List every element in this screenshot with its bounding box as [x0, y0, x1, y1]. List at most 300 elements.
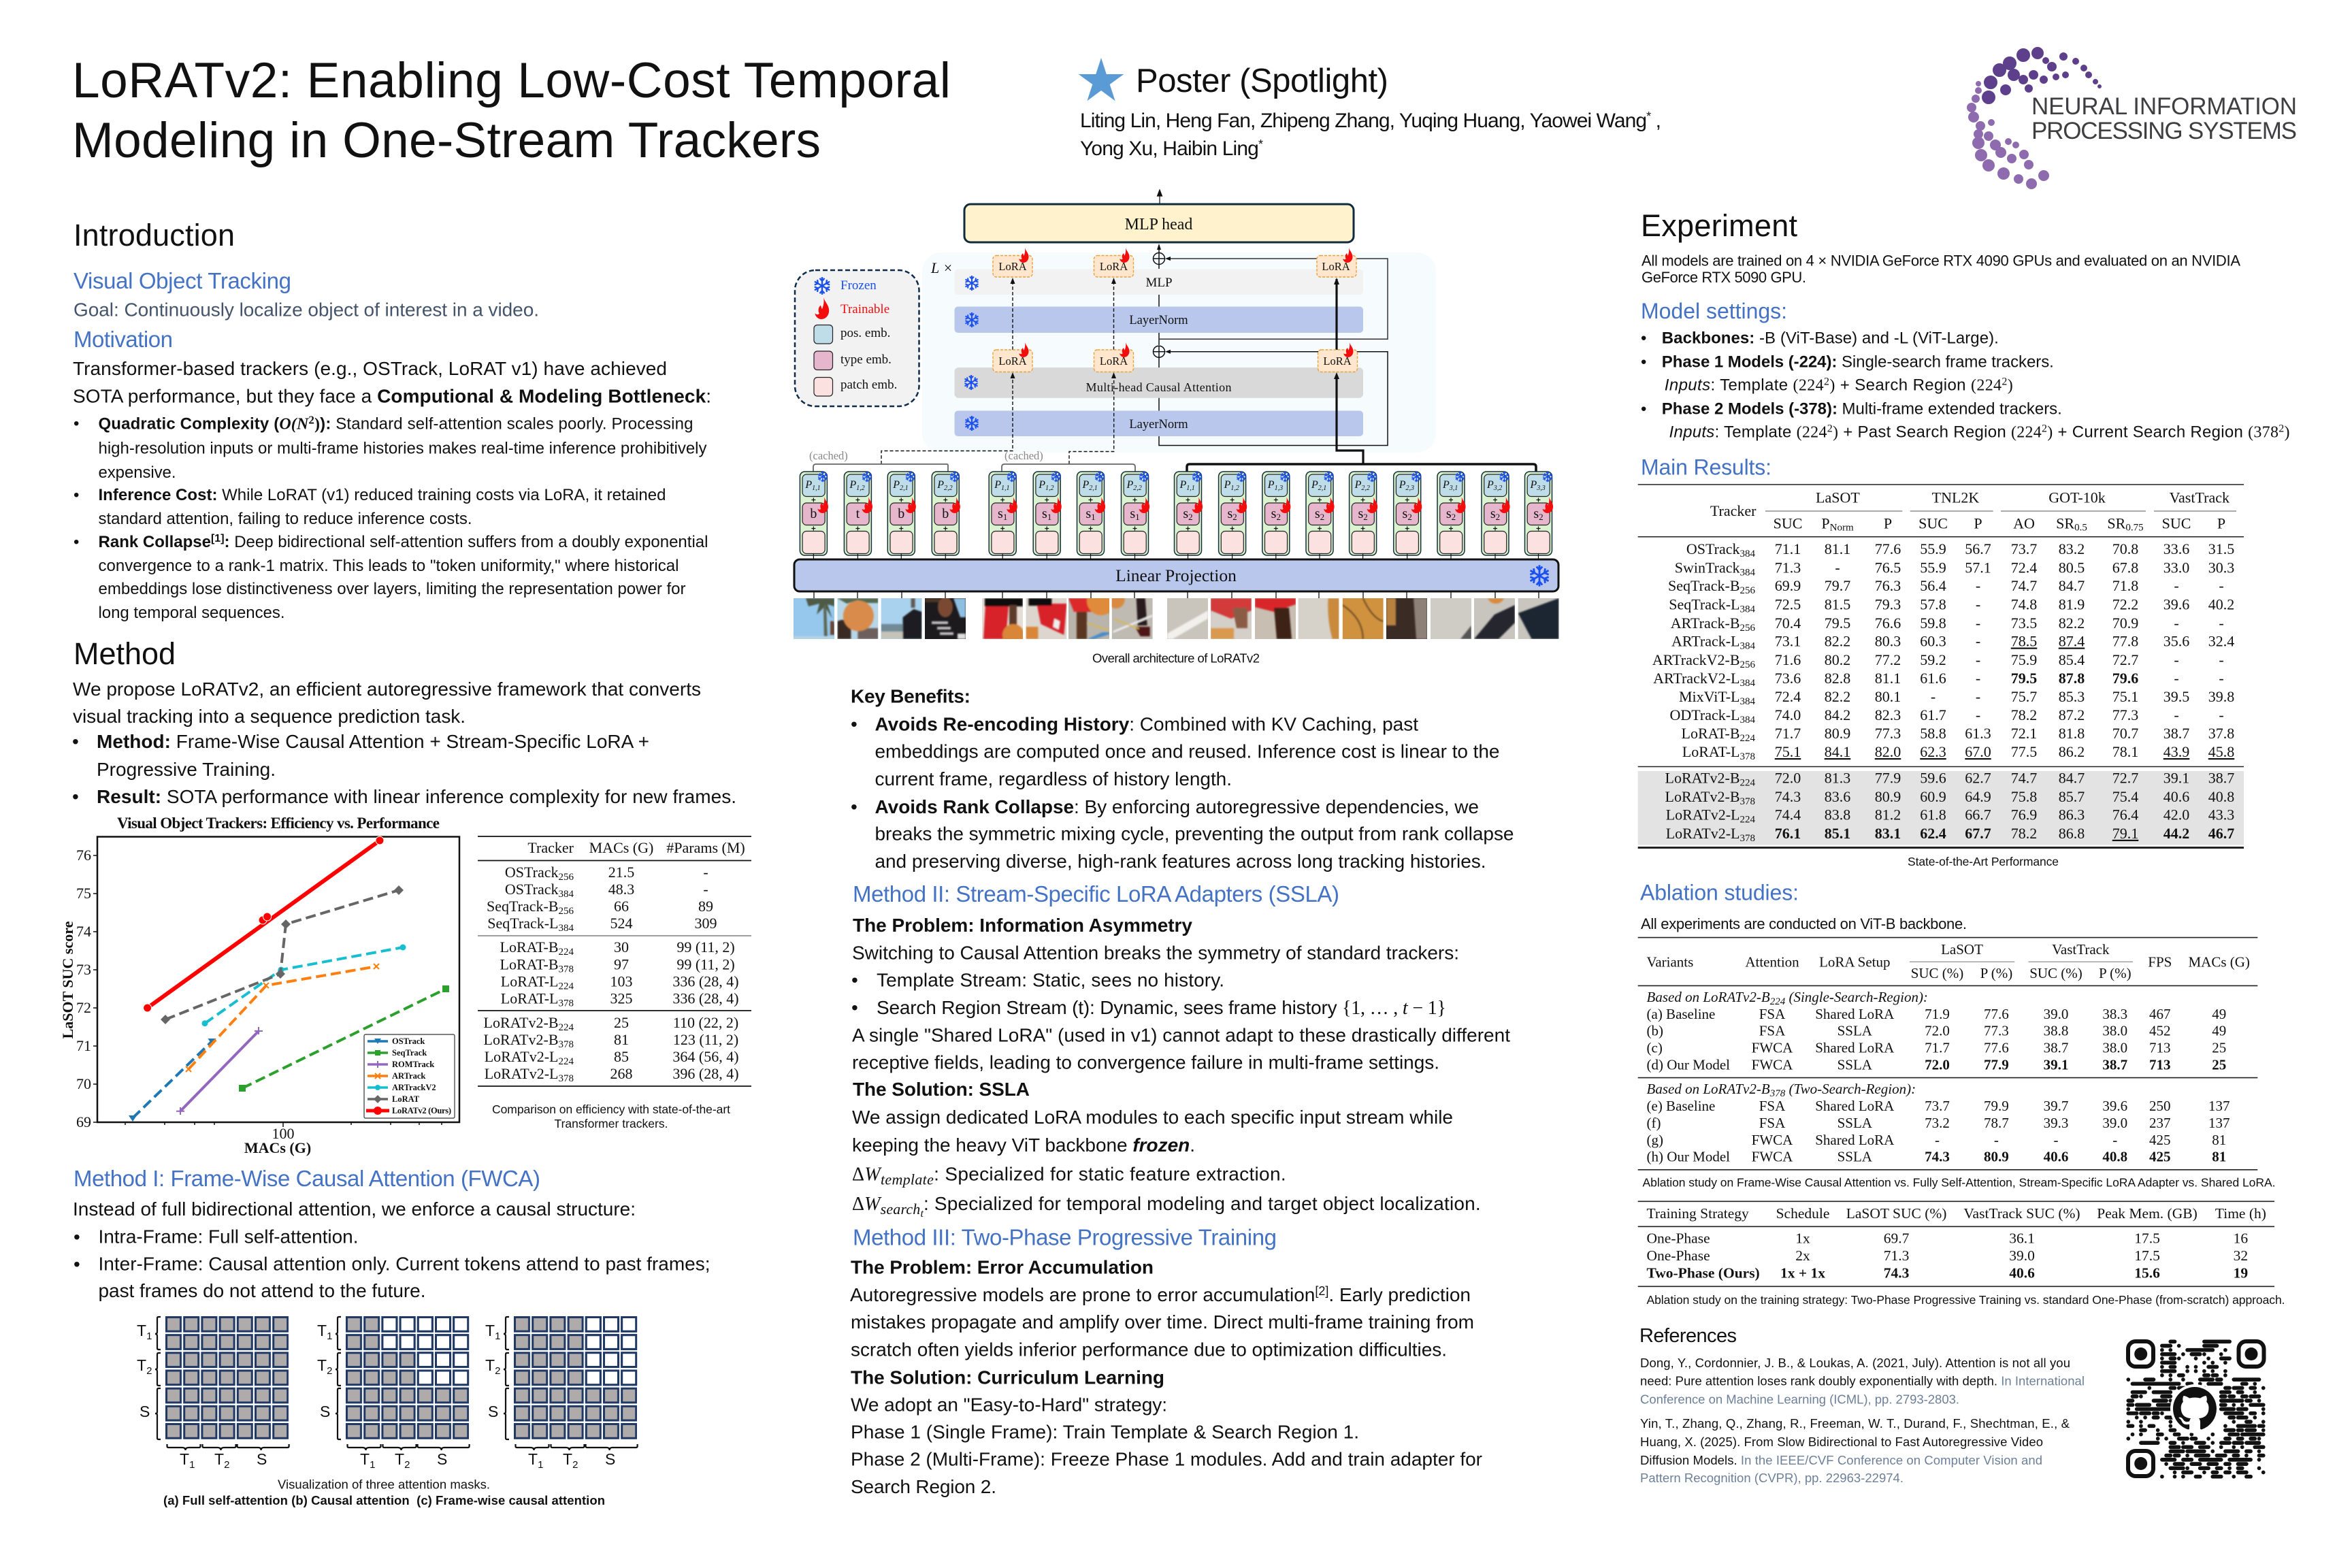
results rows: LoRATv2: 74.7 — [2011, 769, 2037, 787]
MACs values — [608, 864, 634, 1082]
results rows: baselines: - — [2219, 651, 2224, 668]
diagram: attention mask (a): T — [137, 1322, 146, 1339]
tracker column: LoRATv2-L — [1666, 825, 1740, 842]
diagram: attention mask (b): 1 — [327, 1330, 332, 1342]
icon: QR code to GitHub — [2128, 1341, 2264, 1477]
MACs values: 81 — [614, 1031, 629, 1048]
authors: Yong Xu, Haibin Ling — [1080, 137, 1259, 160]
tracker names: LoRATv2-L — [485, 1048, 558, 1065]
results rows: LoRATv2: 75.4 — [2112, 788, 2138, 805]
block: LayerNorm lower: LayerNorm — [1129, 418, 1188, 431]
motivation bullets: ) — [314, 415, 320, 433]
results rows: baselines: - — [1976, 615, 1980, 632]
tokens: template group — [800, 472, 960, 560]
skip connections — [1153, 245, 1388, 445]
table header: #Params (M) — [666, 839, 745, 856]
reference list: Pattern Recognition (CVPR), pp. 22963-22974. — [1640, 1471, 1904, 1485]
group: single-search-region: 49 — [2212, 1006, 2226, 1022]
cached labels: (cached) — [809, 449, 848, 462]
tracker column: 384 — [1740, 641, 1756, 652]
group: two-search-region: Shared LoRA — [1815, 1098, 1895, 1114]
results rows: LoRATv2: 74.3 — [1775, 788, 1801, 805]
results rows: baselines: 39.6 — [2163, 596, 2189, 612]
group: single-search-region: Based on LoRATv2-B — [1647, 989, 1770, 1005]
tokens: current search group: 2 — [1539, 512, 1544, 522]
results rows: baselines: 71.7 — [1775, 725, 1801, 742]
FWCA text: Instead of full bidirectional attention, we enforce a causal structure: — [73, 1198, 636, 1220]
table: ablation variants — [1638, 938, 2257, 1170]
results rows: baselines: 40.2 — [2208, 596, 2234, 612]
tokens: current search group: P — [1487, 479, 1494, 491]
results rows: LoRATv2: 61.8 — [1920, 806, 1946, 823]
reference list — [1640, 1356, 2085, 1485]
tracker column: 384 — [1740, 568, 1756, 578]
tokens: current search group: 2 — [1320, 512, 1324, 522]
results rows: LoRATv2: 40.8 — [2208, 788, 2234, 805]
results rows: LoRATv2: 72.7 — [2112, 769, 2138, 787]
solution title: The Solution: Curriculum Learning — [851, 1367, 1164, 1388]
logo: NeurIPS: PROCESSING SYSTEMS — [2031, 118, 2297, 144]
tokens: past search group: 1,2 — [1045, 485, 1054, 492]
problem text: receptive fields, leading to convergence failure in multi-frame settings. — [852, 1052, 1439, 1073]
table: main results — [1638, 485, 2244, 848]
tokens: current search group: 1,2 — [1230, 485, 1239, 492]
results rows: LoRATv2: 76.4 — [2112, 806, 2138, 823]
group: single-search-region: 71.9 — [1925, 1006, 1950, 1022]
results rows: baselines: 73.1 — [1775, 633, 1801, 649]
results rows: LoRATv2: 78.2 — [2011, 825, 2037, 842]
chart legend — [364, 1034, 455, 1118]
authors: , — [1650, 110, 1661, 132]
table: training strategy: 16 — [2234, 1230, 2248, 1247]
diagram: attention mask (c): S — [488, 1403, 498, 1420]
table header: 0.5 — [2074, 522, 2087, 533]
legend panel: Trainable — [840, 302, 889, 316]
table header: TNL2K — [1932, 489, 1979, 506]
FWCA text: Intra-Frame: Full self-attention. — [98, 1226, 358, 1247]
tokens: current search group: P — [1224, 479, 1230, 491]
results rows: baselines: 81.8 — [2059, 725, 2085, 742]
legend panel: type emb. — [840, 353, 892, 367]
tracker column: 384 — [1740, 678, 1756, 689]
results rows: LoRATv2: 43.3 — [2208, 806, 2234, 823]
tracker column: LoRATv2-B — [1665, 788, 1740, 805]
params values: 309 — [694, 915, 717, 932]
table header: SUC (%) — [1911, 965, 1963, 981]
tracker names: LoRAT-B — [500, 938, 558, 956]
y axis ticks: 75 — [76, 885, 91, 902]
diagram: attention mask (a): 1 — [189, 1459, 195, 1471]
model settings list: + Past Search Region (224 — [1843, 423, 2042, 441]
table: training strategy: 17.5 — [2134, 1230, 2160, 1247]
tracker column: LoRATv2-L — [1666, 806, 1740, 823]
results rows: LoRATv2: 72.0 — [1775, 769, 1801, 787]
motivation paragraph — [73, 358, 711, 407]
benefits list: Avoids Rank Collapse: By enforcing autoregressive dependencies, we — [875, 796, 1479, 817]
results rows: baselines: 71.3 — [1775, 559, 1801, 576]
benefits list: and preserving diverse, high-rank features across long tracking histories. — [875, 851, 1486, 872]
results rows: LoRATv2: 81.2 — [1875, 806, 1901, 823]
group: two-search-region: FWCA — [1752, 1149, 1793, 1165]
group: two-search-region: 237 — [2149, 1115, 2171, 1131]
chart legend: LoRAT — [392, 1094, 420, 1104]
motivation paragraph: SOTA performance, but they face a Computional & Modeling Bottleneck: — [73, 385, 711, 407]
results rows: LoRATv2: 64.9 — [1965, 788, 1991, 805]
tracker names: 224 — [558, 981, 574, 992]
tracker column: 384 — [1740, 549, 1756, 559]
group: single-search-region: FSA — [1759, 1023, 1786, 1039]
model settings list: Backbones: -B (ViT-Base) and -L (ViT-Large). — [1662, 329, 1999, 347]
results rows: baselines: 56.7 — [1965, 540, 1991, 557]
tokens: current search group: P — [1268, 479, 1275, 491]
diagram: attention mask (c) — [485, 1316, 638, 1471]
table: training strategy: 36.1 — [2009, 1230, 2035, 1247]
problem text: scratch often yields inferior performance due to optimization difficulties. — [851, 1339, 1447, 1360]
tracker names: 224 — [558, 1022, 574, 1033]
tokens: past search group: 1 — [1003, 512, 1007, 522]
tracker names: 384 — [558, 923, 574, 934]
model settings list: ) — [2047, 423, 2053, 441]
key benefits heading: Key Benefits: — [851, 686, 970, 706]
authors: Liting Lin, Heng Fan, Zhipeng Zhang, Yuqing Huang, Yaowei Wang — [1080, 110, 1647, 132]
group: single-search-region: (c) — [1647, 1040, 1663, 1056]
MACs values: 97 — [614, 956, 629, 973]
tokens: current search group: 3,3 — [1536, 485, 1546, 492]
results rows: baselines: 82.2 — [1825, 633, 1850, 649]
results rows: LoRATv2: 39.1 — [2163, 769, 2189, 787]
results rows: baselines: 72.1 — [2011, 725, 2037, 742]
tokens: current search group: P — [1180, 479, 1186, 491]
x axis labels: 100 — [272, 1125, 294, 1142]
group: two-search-region: 425 — [2149, 1132, 2171, 1148]
tokens: past search group: P — [1127, 479, 1133, 491]
panel: key benefits — [851, 686, 1514, 872]
results rows: baselines: 81.5 — [1825, 596, 1850, 612]
group: two-search-region: 78.7 — [1984, 1115, 2009, 1131]
MACs values: 268 — [610, 1065, 633, 1082]
MACs values: 103 — [610, 973, 633, 990]
results rows: baselines: 78.1 — [2112, 743, 2138, 760]
tokens: past search group: s — [1130, 506, 1135, 521]
tracker column: 384 — [1740, 604, 1756, 615]
model settings list: 2 — [1827, 423, 1833, 434]
group: two-search-region: (f) — [1647, 1115, 1661, 1131]
group: single-search-region: 38.8 — [2044, 1023, 2068, 1039]
problem text: Switching to Causal Attention breaks the symmetry of standard trackers: — [852, 942, 1459, 964]
diagram: attention mask (a): S — [140, 1403, 150, 1420]
results rows: baselines: 72.2 — [2112, 596, 2138, 612]
group: single-search-region: 77.3 — [1984, 1023, 2009, 1039]
table: training strategy: 32 — [2234, 1247, 2248, 1264]
results rows: LoRATv2: 83.6 — [1825, 788, 1850, 805]
tracker column: 224 — [1740, 814, 1756, 825]
poster badge label: Poster (Spotlight) — [1136, 63, 1388, 99]
solution text: t — [920, 1208, 924, 1220]
table header: P (%) — [2099, 965, 2132, 981]
results rows: LoRATv2: 74.4 — [1775, 806, 1801, 823]
results rows: baselines: 61.3 — [1965, 725, 1991, 742]
results rows: baselines: 67.8 — [2112, 559, 2138, 576]
tokens: current search group: s — [1227, 506, 1232, 521]
heading: ablation studies: Ablation studies: — [1640, 881, 1799, 905]
motivation bullets — [74, 414, 708, 622]
group: two-search-region: FSA — [1759, 1115, 1786, 1131]
results rows: baselines: 83.2 — [2059, 540, 2085, 557]
model settings list: Inputs: Template (224 — [1669, 423, 1827, 441]
table header: P — [1884, 514, 1892, 532]
results rows: baselines: 43.9 — [2163, 743, 2189, 760]
results rows: baselines: 82.8 — [1825, 670, 1850, 687]
table header: AO — [2013, 514, 2035, 532]
results rows: baselines: 59.2 — [1920, 651, 1946, 668]
authors: * — [1258, 137, 1263, 151]
chart title: Visual Object Trackers: Efficiency vs. Performance — [117, 815, 440, 832]
diagram: attention mask (a): 2 — [224, 1459, 229, 1471]
tracker names: 378 — [558, 1039, 574, 1050]
results rows: baselines: 79.5 — [1825, 615, 1850, 632]
y axis ticks: 70 — [76, 1075, 91, 1092]
tracker names: OSTrack — [505, 881, 558, 898]
tokens: current search group — [1175, 472, 1553, 560]
motivation bullets: standard attention, failing to reduce inference costs. — [98, 510, 472, 528]
results rows: baselines: 70.7 — [2112, 725, 2138, 742]
diagram: attention mask (c): T — [485, 1356, 495, 1374]
params values: 336 (28, 4) — [672, 990, 739, 1007]
series: ROMTrack — [176, 1027, 263, 1115]
icons: snowflakes on blocks — [964, 276, 979, 431]
MACs values: 30 — [614, 938, 629, 956]
solution text: We assign dedicated LoRA modules to each specific input stream while — [852, 1107, 1453, 1128]
tokens: template group: P — [937, 479, 944, 491]
table: training strategy: Two-Phase (Ours) — [1647, 1265, 1760, 1281]
y axis ticks: 69 — [76, 1113, 91, 1130]
legend panel — [795, 270, 919, 406]
solution title: The Solution: SSLA — [853, 1079, 1030, 1100]
group: two-search-region: 39.0 — [2102, 1115, 2127, 1131]
group: single-search-region: 25 — [2212, 1040, 2226, 1056]
table header — [1745, 941, 2250, 981]
results rows: baselines: 70.8 — [2112, 540, 2138, 557]
image patches: template — [794, 597, 966, 639]
group: single-search-region: FWCA — [1752, 1056, 1793, 1073]
results rows: LoRATv2: 85.1 — [1825, 825, 1850, 842]
diagram: attention mask (a): S — [257, 1450, 267, 1468]
table: training strategy: One-Phase — [1647, 1247, 1710, 1264]
motivation bullets: long temporal sequences. — [98, 604, 284, 622]
results rows: baselines: 31.5 — [2208, 540, 2234, 557]
group: two-search-region: SSLA — [1838, 1149, 1873, 1165]
dashed cached paths — [881, 280, 1114, 464]
diagram: attention mask (b): 2 — [404, 1459, 410, 1471]
results rows: baselines: 79.7 — [1825, 577, 1850, 594]
results rows: baselines: 61.6 — [1920, 670, 1946, 687]
tracker column: LoRATv2-B — [1665, 769, 1740, 787]
solution text: search — [881, 1200, 920, 1218]
results rows: baselines: 77.3 — [2112, 706, 2138, 723]
results rows: baselines: 72.4 — [2011, 559, 2037, 576]
group: single-search-region: 25 — [2212, 1056, 2226, 1073]
results rows: LoRATv2: 59.6 — [1920, 769, 1946, 787]
results rows: baselines: - — [1835, 559, 1840, 576]
solution text: template — [881, 1171, 934, 1188]
model settings list: Phase 1 Models (-224): Single-search frame trackers. — [1662, 353, 2054, 372]
tokens: past search group: s — [1042, 506, 1047, 521]
y axis ticks — [76, 847, 91, 1130]
method paragraph: Method: Frame-Wise Causal Attention + Stream-Specific LoRA + — [97, 731, 649, 752]
legend panel: pos. emb. — [840, 326, 890, 340]
table header: 0.75 — [2125, 522, 2144, 533]
group: two-search-region: 79.9 — [1984, 1098, 2009, 1114]
table: training strategy: 2x — [1795, 1247, 1810, 1264]
results rows: baselines: 72.5 — [1775, 596, 1801, 612]
table: training strategy: 17.5 — [2134, 1247, 2160, 1264]
solution text: ΔW — [852, 1164, 881, 1186]
results rows: LoRATv2: 75.8 — [2011, 788, 2037, 805]
results rows: baselines: 80.3 — [1875, 633, 1901, 649]
results rows: baselines: 71.8 — [2112, 577, 2138, 594]
results rows: baselines: 79.3 — [1875, 596, 1901, 612]
table: training strategy: 40.6 — [2009, 1265, 2035, 1281]
model settings list: ) — [2008, 376, 2013, 394]
LoRA adapters: LoRA — [1322, 260, 1350, 273]
results rows: baselines: 57.8 — [1920, 596, 1946, 612]
results rows: baselines: 35.6 — [2163, 633, 2189, 649]
problem text: • — [851, 997, 858, 1018]
block: linear projection: Linear Projection — [1115, 566, 1237, 585]
table: training strategy: One-Phase — [1647, 1230, 1710, 1247]
chart legend: ARTrack — [392, 1071, 425, 1081]
block: multi-head causal attention — [954, 368, 1363, 398]
results rows: baselines: 69.9 — [1775, 577, 1801, 594]
connectors to image patches — [814, 591, 1539, 598]
tokens: current search group: s — [1183, 506, 1188, 521]
group: two-search-region: 39.6 — [2102, 1098, 2127, 1114]
title: Modeling in One-Stream Trackers — [72, 113, 821, 168]
results rows: baselines: 71.1 — [1775, 540, 1801, 557]
table header: GOT-10k — [2048, 489, 2106, 506]
tracker column: ARTrack-B — [1671, 615, 1740, 632]
hardware text — [1642, 252, 2240, 286]
LoRA adapters: LoRA — [998, 355, 1027, 368]
tokens: current search group: P — [1311, 479, 1318, 491]
tokens: current search group: 3,2 — [1493, 485, 1502, 492]
results rows: baselines: 73.5 — [2011, 615, 2037, 632]
current search bracket — [1187, 464, 1536, 472]
group: two-search-region: FSA — [1759, 1098, 1786, 1114]
results rows: baselines: 81.1 — [1875, 670, 1901, 687]
benefits list: • — [851, 796, 858, 817]
tracker names: LoRAT-L — [501, 973, 558, 990]
group: single-search-region: 38.3 — [2102, 1006, 2127, 1022]
tracker column: 256 — [1740, 659, 1756, 670]
results rows: baselines: 77.5 — [2011, 743, 2037, 760]
tokens: current search group: 2 — [1452, 512, 1456, 522]
params values: 364 (56, 4) — [672, 1048, 739, 1065]
tokens: current search group: s — [1533, 506, 1539, 521]
motivation bullets: embeddings lose distinctiveness over layers, limiting the representation power for — [98, 580, 686, 598]
diagram: LoRATv2 architecture — [794, 190, 1559, 666]
block: MLP head: MLP head — [1125, 216, 1192, 233]
heading: Method III: Two-Phase Progressive Training — [853, 1224, 1277, 1250]
group: two-search-region: 378 — [1769, 1088, 1786, 1099]
results rows: baselines: 71.6 — [1775, 651, 1801, 668]
group: single-search-region: 77.6 — [1984, 1040, 2009, 1056]
diagram: attention mask (b) — [317, 1316, 470, 1471]
group: two-search-region: Shared LoRA — [1815, 1132, 1895, 1148]
group: single-search-region: 713 — [2149, 1040, 2171, 1056]
results rows: baselines: 75.9 — [2011, 651, 2037, 668]
tokens: current search group: s — [1490, 506, 1496, 521]
results rows: baselines: 67.0 — [1965, 743, 1991, 760]
group: single-search-region: 38.7 — [2102, 1056, 2127, 1073]
group: two-search-region: (Two-Search-Region): — [1785, 1081, 1916, 1097]
tokens: past search group: P — [994, 479, 1001, 491]
solution text: keeping the heavy ViT backbone frozen. — [852, 1134, 1195, 1156]
model settings list: + Search Region (224 — [1840, 376, 2002, 394]
diagram: attention mask (c): 2 — [572, 1459, 578, 1471]
table header: Norm — [1830, 522, 1854, 533]
tokens: current search group: 1,1 — [1186, 485, 1195, 492]
reference list: Huang, X. (2025). From Slow Bidirectional to Fast Autoregressive Video — [1640, 1435, 2043, 1449]
table header: P — [2217, 514, 2225, 532]
LoRA adapters — [993, 256, 1357, 372]
group: two-search-region: 40.8 — [2102, 1149, 2127, 1165]
results rows: baselines: 74.0 — [1775, 706, 1801, 723]
solution text: Phase 2 (Multi-Frame): Freeze Phase 1 modules. Add and train adapter for — [851, 1448, 1482, 1470]
group: single-search-region: SSLA — [1838, 1056, 1873, 1073]
table: training strategy: Peak Mem. (GB) — [2097, 1205, 2198, 1222]
reference list: need: Pure attention loses rank doubly exponentially with depth. In International — [1640, 1374, 2085, 1388]
model settings list — [1641, 329, 2289, 441]
group: two-search-region: Based on LoRATv2-B — [1647, 1081, 1770, 1097]
caption: ablation variants: Ablation study on Frame-Wise Causal Attention vs. Fully Self-Attention, Stream-Specific LoRA Adapter vs. Shared LoRA. — [1643, 1176, 2276, 1190]
block light panel — [922, 252, 1436, 453]
solution text — [851, 1394, 1482, 1497]
group: two-search-region: 250 — [2149, 1098, 2171, 1114]
group: two-search-region: - — [1935, 1132, 1940, 1148]
results rows: LoRATv2: 44.2 — [2163, 825, 2189, 842]
results rows: LoRATv2 — [1775, 769, 2234, 842]
table: training strategy: Time (h) — [2215, 1205, 2266, 1222]
tracker column: ARTrack-L — [1671, 633, 1740, 649]
tracker names: LoRAT-L — [501, 990, 558, 1007]
chart legend: SeqTrack — [392, 1048, 427, 1058]
benefits list: • — [851, 713, 858, 735]
table: training strategy: 1x + 1x — [1780, 1265, 1825, 1281]
table header — [1774, 489, 2230, 533]
results rows: baselines: 57.1 — [1965, 559, 1991, 576]
results rows: baselines: 73.7 — [2011, 540, 2037, 557]
model settings list: Inputs: Template (224 — [1665, 376, 1824, 394]
tokens: current search group: 2,3 — [1405, 485, 1414, 492]
image patches: current search — [1167, 598, 1559, 639]
tokens: template group: 1,1 — [812, 485, 821, 492]
results rows: baselines: 70.4 — [1775, 615, 1801, 632]
tracker column: LoRAT-B — [1682, 725, 1740, 742]
tracker column: LoRAT-L — [1682, 743, 1740, 760]
MACs values: 21.5 — [608, 864, 634, 881]
group: two-search-region — [1647, 1081, 2230, 1165]
group: single-search-region — [1647, 989, 2226, 1073]
group: two-search-region: 137 — [2208, 1115, 2230, 1131]
table: training strategy — [1638, 1201, 2274, 1286]
diagram: attention mask (a): T — [180, 1450, 189, 1468]
tracker column: 224 — [1740, 733, 1756, 744]
cached labels — [809, 449, 1043, 462]
heading: Introduction: Introduction — [74, 218, 235, 252]
group: single-search-region: 71.7 — [1925, 1040, 1950, 1056]
tokens: template group: 2,2 — [944, 485, 953, 492]
